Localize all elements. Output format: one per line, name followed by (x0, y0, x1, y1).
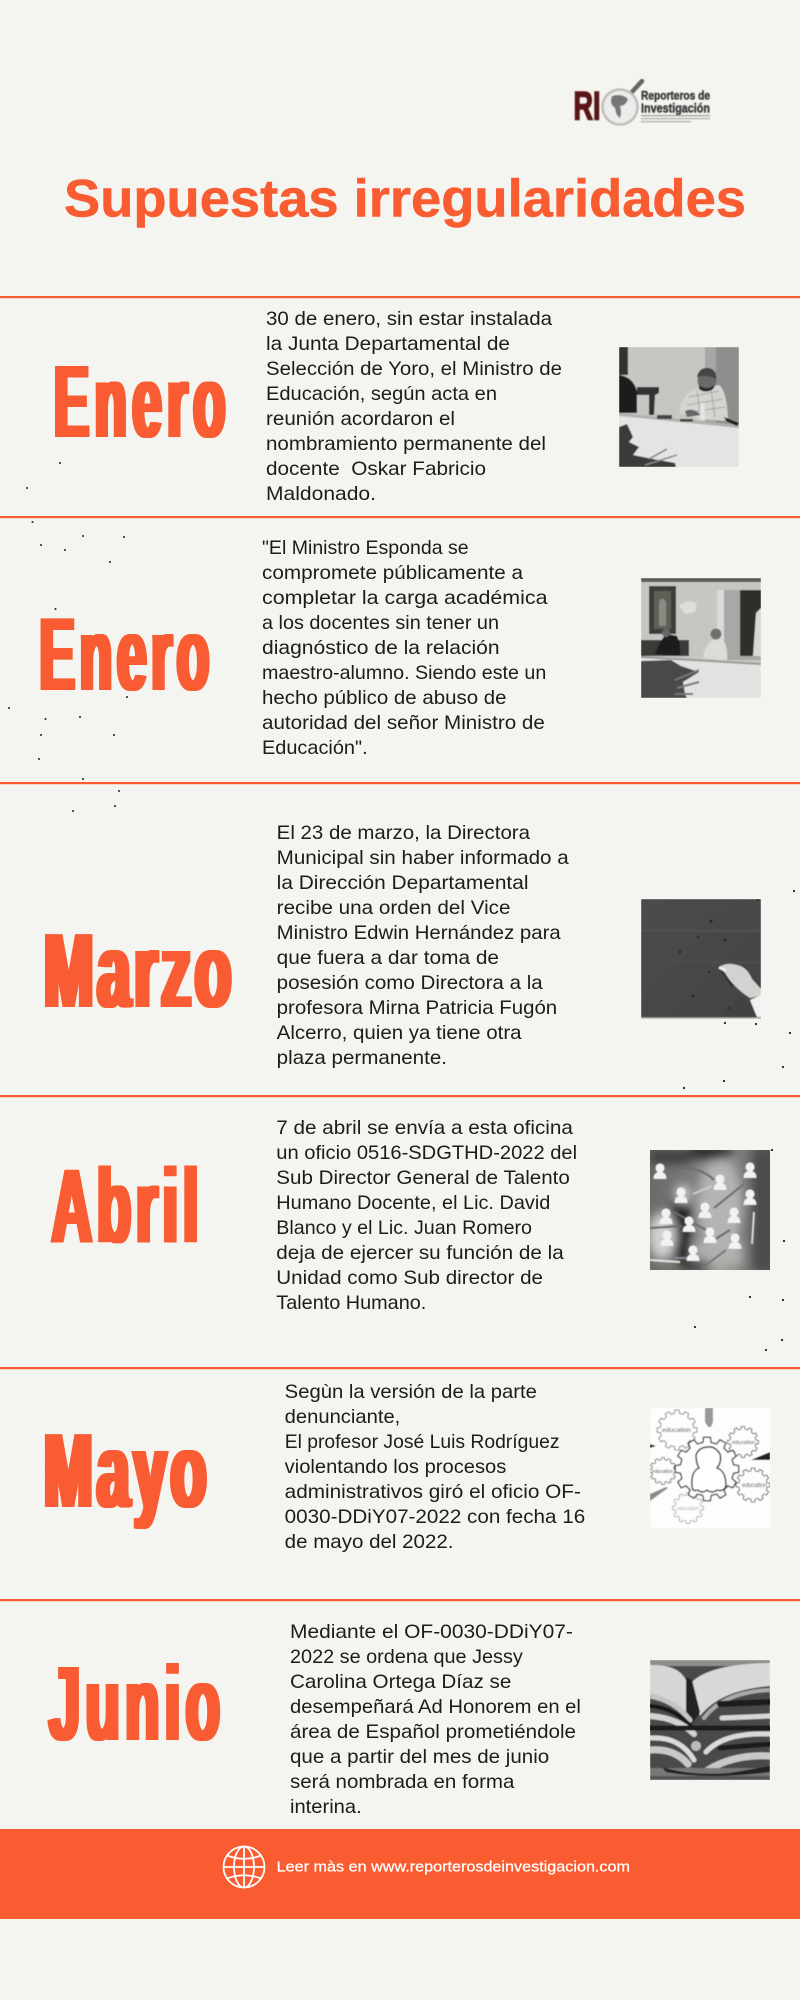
logo: Reporteros de Investigación: RI (574, 84, 600, 128)
text block: compromete públicamente a (262, 562, 523, 584)
text block: Selección de Yoro, el Ministro de (266, 358, 562, 380)
text block: maestro-alumno. Siendo este un (262, 662, 546, 684)
text block: nombramiento permanente del (266, 433, 546, 455)
month heading: Enero (54, 345, 231, 460)
background specks (8, 387, 795, 1351)
photo: gears around person: education (742, 1483, 767, 1489)
text block: denunciante, (285, 1406, 400, 1428)
photo: gears around person: education (652, 1469, 673, 1475)
text block: será nombrada en forma (290, 1771, 515, 1793)
text block: Unidad como Sub director de (276, 1267, 543, 1289)
photo: gears around person: education (662, 1427, 691, 1434)
text block: Humano Docente, el Lic. David (276, 1192, 550, 1214)
month heading: Abril (52, 1146, 203, 1265)
panel: Abril (52, 1117, 770, 1314)
text block: Segùn la versión de la parte (285, 1381, 537, 1403)
text block: 2022 se ordena que Jessy (290, 1646, 523, 1668)
text block: Blanco y el Lic. Juan Romero (276, 1217, 532, 1239)
panel: Marzo (44, 822, 761, 1069)
photo: stack of open books (650, 1660, 770, 1780)
text block (285, 1381, 585, 1553)
text block: posesión como Directora a la (277, 972, 543, 994)
logo: Reporteros de Investigación: Reporteros de (641, 90, 710, 102)
text block (266, 308, 562, 505)
text block: Sub Director General de Talento (276, 1167, 570, 1189)
text block: Municipal sin haber informado a (277, 847, 569, 869)
text block: violentando los procesos (285, 1456, 507, 1478)
text block: Ministro Edwin Hernández para (277, 922, 561, 944)
photo: officials at table (641, 578, 761, 698)
text block: área de Español prometiéndole (290, 1721, 576, 1743)
text block: un oficio 0516-SDGTHD-2022 del (276, 1142, 577, 1164)
text block: de mayo del 2022. (285, 1531, 454, 1553)
text block: Educación, según acta en (266, 383, 497, 405)
text block: a los docentes sin tener un (262, 612, 499, 634)
text block: que fuera a dar toma de (277, 947, 499, 969)
text block: El profesor José Luis Rodríguez (285, 1431, 560, 1453)
text block: 7 de abril se envía a esta oficina (276, 1117, 573, 1139)
text block: Mediante el OF-0030-DDiY07- (290, 1621, 573, 1643)
footer banner (0, 1829, 800, 1919)
text block: Talento Humano. (276, 1292, 426, 1314)
text block: docente Oskar Fabricio (266, 458, 486, 480)
text block: Educación". (262, 737, 368, 759)
text block: interina. (290, 1796, 362, 1818)
month heading: Enero (40, 597, 214, 713)
month heading: Mayo (44, 1413, 211, 1531)
photo: gears around person: education (677, 1506, 699, 1512)
photo: network of people (650, 1150, 770, 1270)
text block: la Dirección Departamental (277, 872, 528, 894)
photo: hand writing on chalkboard (641, 899, 761, 1019)
text block: deja de ejercer su función de la (276, 1242, 564, 1264)
text block: 30 de enero, sin estar instalada (266, 308, 552, 330)
photo: gears around person: education (732, 1440, 755, 1446)
text block: que a partir del mes de junio (290, 1746, 549, 1768)
footer link text: Leer màs en www.reporterosdeinvestigacion.com (277, 1860, 630, 1876)
title: Supuestas irregularidades (64, 170, 746, 228)
text block: El 23 de marzo, la Directora (277, 822, 530, 844)
text block: recibe una orden del Vice (277, 897, 510, 919)
text block: profesora Mirna Patricia Fugón (277, 997, 557, 1019)
text block: autoridad del señor Ministro de (262, 712, 545, 734)
text block: desempeñará Ad Honorem en el (290, 1696, 581, 1718)
text block: 0030-DDiY07-2022 con fecha 16 (285, 1506, 585, 1528)
text block: Alcerro, quien ya tiene otra (277, 1022, 522, 1044)
text block: Maldonado. (266, 483, 376, 505)
text block: reunión acordaron el (266, 408, 455, 430)
text block (277, 822, 569, 1069)
text block (262, 537, 548, 759)
icon: globe (224, 1846, 264, 1888)
panel: Enero 1 (54, 308, 739, 505)
text block: completar la carga académica (262, 587, 548, 609)
logo: Reporteros de Investigación: Investigación (641, 100, 710, 116)
text block: diagnóstico de la relación (262, 637, 500, 659)
text block (276, 1117, 577, 1314)
text block: Carolina Ortega Díaz se (290, 1671, 511, 1693)
section divider lines (0, 296, 800, 1601)
month heading: Marzo (44, 912, 235, 1030)
text block (290, 1621, 581, 1818)
text block: la Junta Departamental de (266, 333, 510, 355)
photo: man at table (619, 347, 739, 467)
text block: "El Ministro Esponda se (262, 537, 469, 559)
panel: Mayo (44, 1381, 770, 1553)
panel: Junio (49, 1621, 770, 1818)
logo: Reporteros de Investigación (574, 81, 710, 128)
photo: gears around person (650, 1408, 770, 1528)
text block: administrativos giró el oficio OF- (285, 1481, 581, 1503)
text block: hecho público de abuso de (262, 687, 506, 709)
panel: Enero 2 (40, 537, 761, 759)
month heading: Junio (49, 1644, 225, 1762)
person outline (692, 1447, 726, 1492)
text block: plaza permanente. (277, 1047, 447, 1069)
